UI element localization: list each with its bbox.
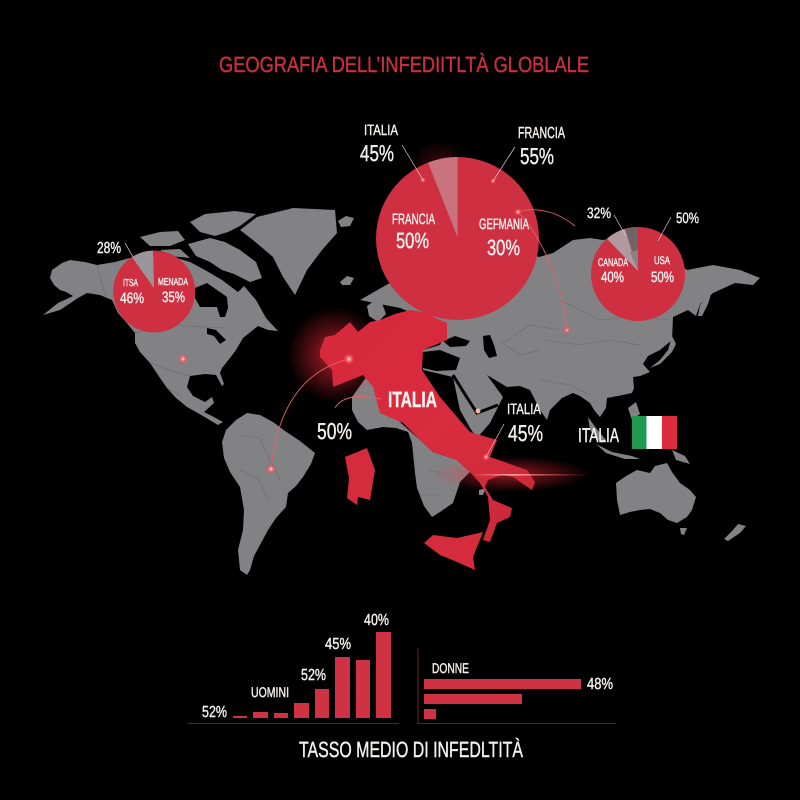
glow: southern Italy <box>430 456 590 492</box>
label: Italia by flag: ITALIA <box>578 425 619 447</box>
arcs from Germania <box>518 210 575 330</box>
label: Francia 50% <box>392 211 435 253</box>
label: 50%: 50% <box>676 210 699 227</box>
leader: southern Italy <box>486 424 504 457</box>
label: USA 50%: USA <box>654 255 670 267</box>
label: Canada 40% <box>598 257 628 286</box>
label: Italia 45% on map: 45% <box>508 420 543 446</box>
value: 45%: 45% <box>325 636 351 653</box>
arc: South America to Italy <box>271 359 349 469</box>
bars <box>424 679 581 719</box>
value: 48%: 48% <box>587 676 613 693</box>
value: 52%: 52% <box>301 667 326 684</box>
icon: Italian flag <box>632 416 677 449</box>
bars <box>233 632 391 718</box>
pie chart: North America <box>97 240 195 332</box>
pie slice <box>113 250 195 332</box>
value: 40%: 40% <box>364 612 389 629</box>
label: Francia 55%: FRANCIA <box>518 125 565 142</box>
label: Menada 35%: 35% <box>162 289 185 306</box>
label: Italia 45% <box>360 122 398 166</box>
sea: Red Sea <box>453 375 498 413</box>
pie dots <box>420 177 522 216</box>
landmass: North America <box>43 254 278 425</box>
connector arcs <box>178 326 571 474</box>
sea: Hudson Bay and Great Lakes <box>195 283 228 344</box>
label: Francia 50%: FRANCIA <box>392 211 435 228</box>
world map <box>43 208 760 575</box>
leader: Francia <box>493 147 515 181</box>
landmass: New Zealand <box>724 524 746 541</box>
landmass: Greenland <box>240 208 337 295</box>
label: ITSA 46% <box>120 278 144 307</box>
landmass: Eurasia <box>360 232 760 438</box>
pie disc <box>591 227 685 321</box>
label: 50% on map: 50% <box>317 418 352 444</box>
landmass: Australia <box>616 463 696 535</box>
light wedge <box>607 229 638 271</box>
leader: 28% <box>125 243 133 257</box>
Italy highlight <box>287 307 590 570</box>
glow: pie top <box>410 140 470 200</box>
label: Italia 45% on map: ITALIA <box>507 401 541 418</box>
leader: 32% <box>614 215 626 236</box>
label: Canada 40%: CANADA <box>598 257 628 269</box>
seas: inland water <box>423 335 497 371</box>
pie chart: Asia <box>587 205 699 321</box>
label: Uomini: UOMINI <box>251 684 289 700</box>
inner wedge <box>630 250 638 271</box>
highlight: Red Sea spot <box>476 408 480 414</box>
label: Francia 55% <box>518 125 565 169</box>
country borders <box>97 265 668 500</box>
arc: 50% callout <box>335 396 381 408</box>
label: Menada 35%: MENADA <box>158 277 188 288</box>
label: ITSA 46%: ITSA <box>123 278 138 289</box>
label: 28%: 28% <box>97 240 121 257</box>
label: USA 50% <box>651 255 674 286</box>
label: Donne: DONNE <box>432 660 469 676</box>
landmass: Arctic islands <box>140 211 262 282</box>
label: Germania 30%: 30% <box>487 235 520 260</box>
label: Francia 50%: 50% <box>396 228 429 253</box>
label: Italia 45%: 45% <box>360 140 394 166</box>
location dots <box>178 326 571 474</box>
label: Italia 45%: ITALIA <box>364 122 398 139</box>
pie chart: Europe <box>360 122 575 330</box>
pie disc <box>376 157 539 320</box>
label: USA 50%: 50% <box>651 269 674 286</box>
chart heading: TASSO MEDIO DI INFEDLTITÀ <box>299 737 523 762</box>
label: Germania 30% <box>479 216 529 260</box>
label: 32%: 32% <box>587 205 611 222</box>
label: Germania 30%: GEFMANIA <box>479 216 529 233</box>
glow: northern Italy <box>287 307 383 403</box>
light wedge <box>428 157 458 237</box>
value: 52% low: 52% <box>202 704 227 721</box>
light flare <box>470 474 590 476</box>
landmass: Japan and Sakhalin <box>650 291 712 368</box>
Italy peninsula <box>320 310 535 542</box>
landmass: Iceland and Britain <box>338 216 386 322</box>
landmass: Madagascar <box>479 488 486 495</box>
dark wedge <box>625 227 638 271</box>
landmass: South America <box>222 413 315 575</box>
label: Italia on map: ITALIA <box>388 387 437 412</box>
title: GEOGRAFIA DELL’INFEDIITLTÀ GLOBLALE <box>219 52 589 77</box>
label: Italia 45% on map <box>507 401 543 446</box>
bar chart: women <box>418 648 616 724</box>
axis <box>188 723 399 724</box>
Sardinia <box>345 448 375 505</box>
Sicily <box>424 532 483 570</box>
translucent wedge <box>132 250 154 288</box>
label: Canada 40%: 40% <box>601 269 624 286</box>
axes <box>418 648 616 724</box>
label: Menada 35% <box>158 277 188 306</box>
leader: 50% <box>658 217 671 241</box>
landmass: Southeast Asia islands <box>588 402 690 464</box>
label: ITSA 46%: 46% <box>120 290 144 307</box>
leader: Italia <box>402 145 423 180</box>
landmass: Africa <box>352 376 470 517</box>
bar chart: men <box>188 612 399 724</box>
label: Francia 55%: 55% <box>520 143 554 169</box>
